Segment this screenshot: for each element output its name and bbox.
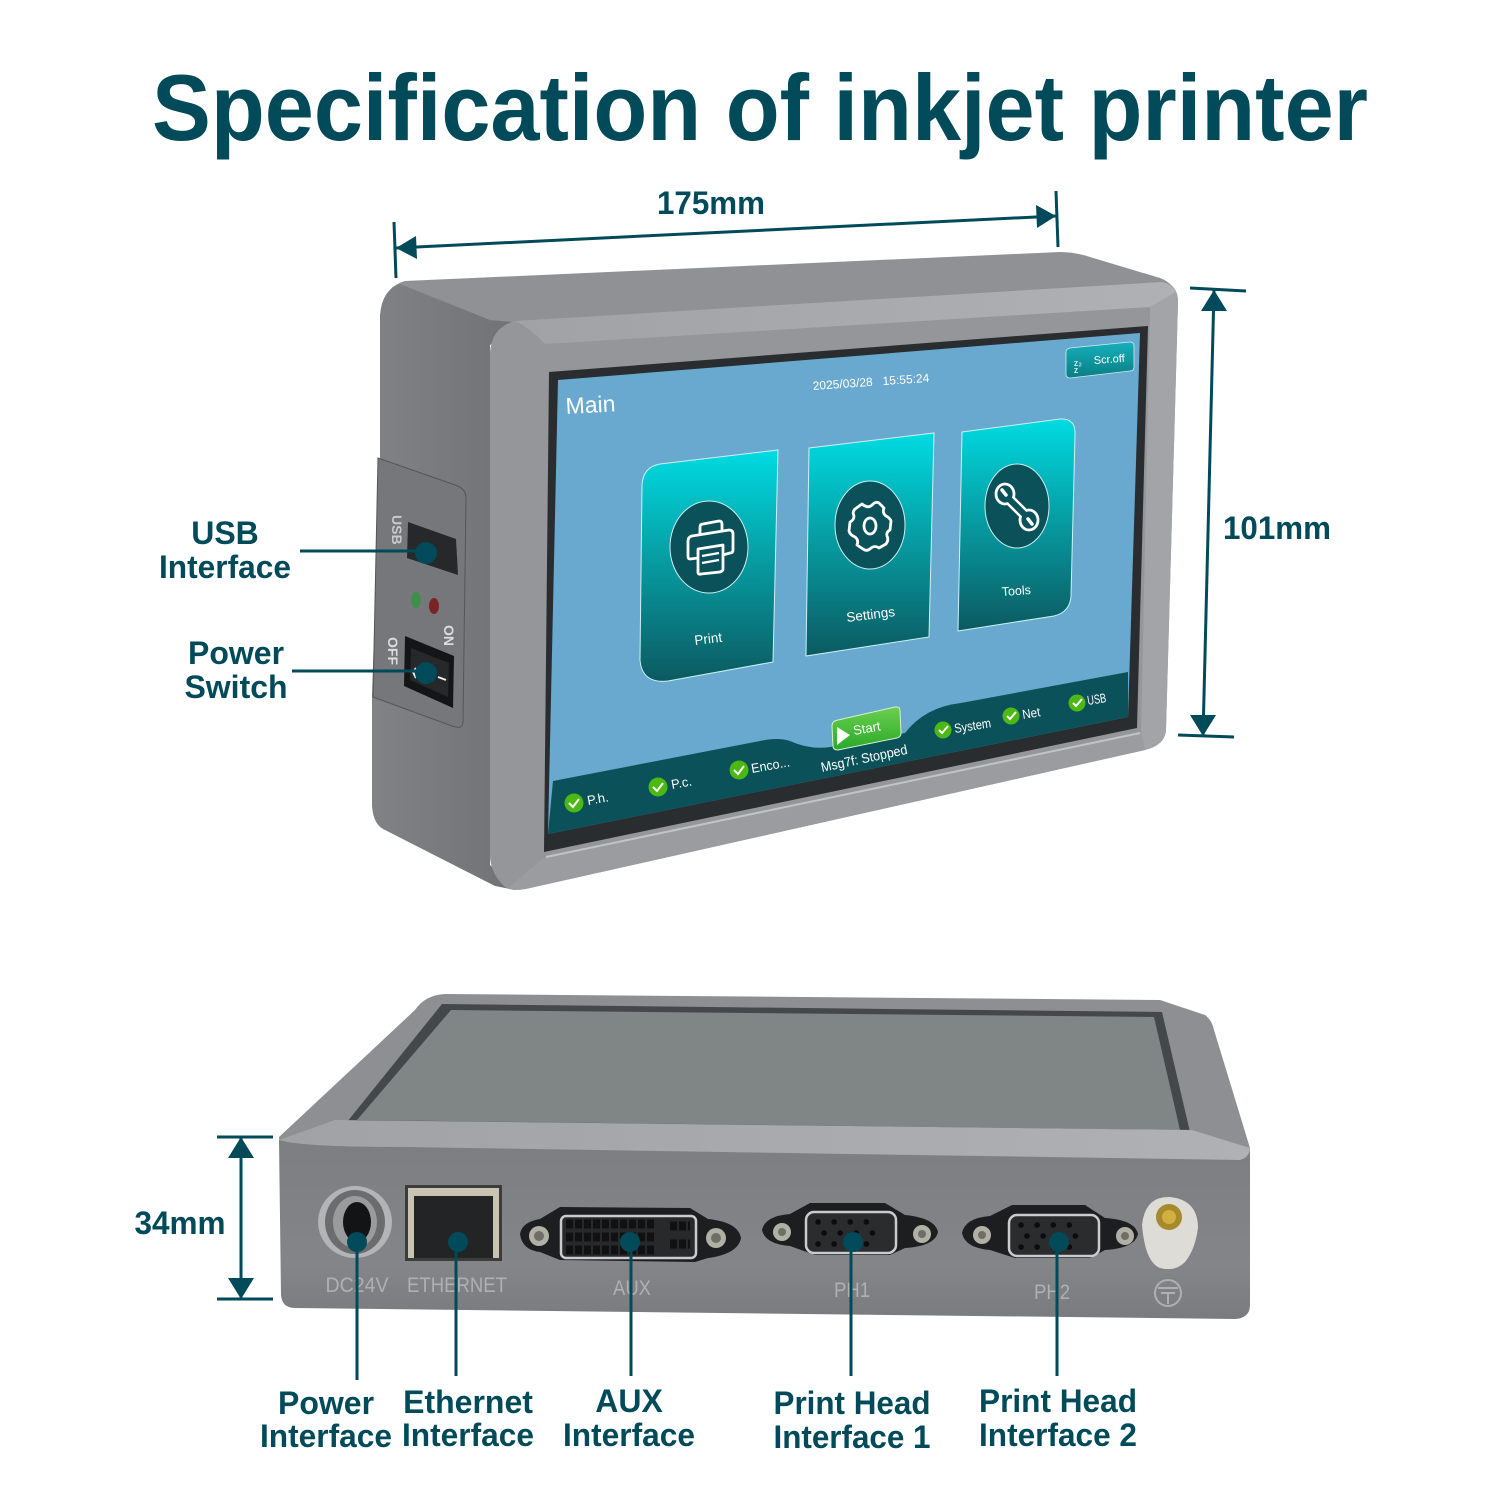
callout: Print Head Interface 2: Print Head: [979, 1383, 1137, 1419]
top face: [380, 252, 1178, 345]
status indicators: P.h.: [586, 789, 610, 808]
port: PH2: [962, 1205, 1138, 1304]
callout: Ethernet Interface: Ethernet: [403, 1384, 533, 1420]
callout: Print Head Interface 1: Print Head: [774, 1385, 930, 1421]
card: Settings: [806, 433, 934, 656]
device: front view: [372, 252, 1178, 890]
callout: USB Interface: [159, 515, 437, 585]
callout: Print Head Interface 1: [774, 1232, 930, 1455]
dimension: 101mm: [1178, 288, 1331, 737]
card: Settings: Settings: [846, 604, 896, 625]
glass recess: [347, 1004, 1190, 1132]
screen off button: z: [1073, 365, 1079, 375]
screen: [548, 333, 1140, 834]
card: Print: [640, 450, 778, 681]
icon: wrench: [996, 484, 1038, 530]
port: AUX: AUX: [613, 1277, 651, 1300]
status indicators: [564, 690, 1107, 812]
LED green: [411, 592, 421, 608]
status indicators: P.c.: [670, 774, 693, 792]
port: Ethernet: [405, 1185, 507, 1297]
callout: Print Head Interface 1: Interface 1: [774, 1419, 930, 1455]
callout: Power Switch: Power: [188, 635, 284, 671]
screen heading: Main: Main: [565, 390, 616, 419]
icon: gear: [849, 502, 891, 550]
callout: Power Interface: Interface: [260, 1418, 392, 1454]
status indicators: System: [953, 715, 992, 736]
callout: Ethernet Interface: [402, 1232, 534, 1453]
screen frame: [544, 326, 1148, 852]
status indicators: USB: [1086, 690, 1107, 708]
date and time: 2025/03/28 15:55:24: [812, 371, 930, 393]
dimension: 175mm: [394, 185, 1058, 278]
port: PH2: PH2: [1034, 1281, 1070, 1304]
callout: AUX Interface: Interface: [563, 1417, 695, 1453]
front bevel: [279, 1120, 1250, 1161]
status text: Msg7f: Stopped: [820, 742, 909, 775]
status indicators: Net: [1021, 704, 1042, 722]
rear panel: [279, 1140, 1250, 1319]
status indicators: Enco...: [750, 754, 791, 776]
title: Specification of inkjet printer: [152, 55, 1368, 160]
callout: USB Interface: Interface: [159, 549, 291, 585]
card: Tools: Tools: [1001, 583, 1031, 599]
callout: Print Head Interface 2: [979, 1232, 1137, 1453]
callout: Power Switch: [184, 635, 437, 705]
screen status bar: [548, 672, 1128, 834]
callout: Print Head Interface 2: Interface 2: [979, 1417, 1137, 1453]
port: DC24V: [318, 1186, 392, 1297]
OFF label: OFF: [385, 637, 401, 665]
port: Ethernet: ETHERNET: [407, 1274, 507, 1297]
side face: [372, 284, 515, 890]
dimension: 175mm: 175mm: [657, 185, 765, 221]
power switch: [404, 636, 454, 708]
callout: Power Switch: Switch: [184, 669, 288, 705]
callout: Power Interface: [260, 1232, 392, 1454]
callout: AUX Interface: AUX: [595, 1383, 663, 1419]
screen off button: z₂: [1073, 357, 1083, 368]
callout: AUX Interface: [563, 1232, 695, 1453]
start button: Start: [852, 718, 882, 738]
dimension: 34mm: 34mm: [134, 1205, 226, 1241]
right bevel: [1141, 292, 1178, 750]
card: Print: Print: [694, 630, 723, 648]
side control panel: [373, 458, 466, 727]
ground terminal: [1142, 1197, 1198, 1306]
dimension: 101mm: 101mm: [1223, 510, 1331, 546]
callout: Power Interface: Power: [278, 1385, 374, 1421]
front frame: [490, 282, 1178, 890]
port: AUX: [520, 1207, 741, 1300]
callout: Ethernet Interface: Interface: [402, 1417, 534, 1453]
top bevel: [515, 282, 1176, 344]
glass: [357, 1010, 1180, 1130]
dimension: 34mm: [134, 1137, 273, 1299]
device: rear view: [279, 994, 1250, 1319]
icon: printer: [688, 521, 733, 574]
screen off button: [1066, 342, 1134, 378]
bezel highlight: [546, 733, 1140, 857]
port: PH1: [762, 1203, 938, 1302]
bottom bevel: [508, 732, 1145, 890]
top frame: [279, 994, 1250, 1160]
screen off button: Scr.off: [1093, 353, 1126, 367]
port: PH1: PH1: [834, 1279, 870, 1302]
ON label: ON: [441, 625, 457, 646]
start button: [832, 707, 901, 750]
USB label: USB: [389, 515, 405, 545]
USB port: [407, 522, 458, 575]
card: Tools: [958, 419, 1075, 631]
callout: USB Interface: USB: [191, 515, 259, 551]
port: DC24V: DC24V: [326, 1274, 388, 1297]
LED red: [429, 598, 439, 614]
